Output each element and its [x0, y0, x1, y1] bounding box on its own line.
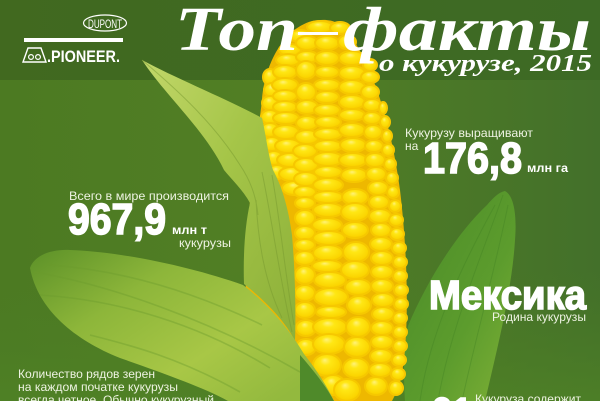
icon: upper-left leaf and husk wrapping the cob	[142, 60, 295, 341]
stat: world production: млн т	[172, 225, 207, 237]
stat: world production	[68, 189, 231, 250]
text block: kernel rows: на каждом початке кукурузы	[18, 380, 178, 394]
stat: contents	[432, 389, 581, 401]
stat: area grown: 176,8	[423, 134, 522, 183]
text block: kernel rows	[18, 367, 214, 401]
logo: Pioneer: .PIONEER.	[47, 47, 120, 66]
stat: world production: кукурузы	[179, 236, 231, 250]
stat: area grown: Кукурузу выращивают	[405, 126, 534, 140]
stat: area grown: млн га	[527, 163, 569, 175]
cob base	[240, 20, 407, 401]
corn cob	[240, 20, 408, 401]
logo: DuPont: DUPONT	[88, 17, 122, 31]
stat: area grown: на	[405, 139, 419, 153]
icon: big lower-left leaf	[30, 250, 334, 401]
stat: homeland: Родина кукурузы	[492, 310, 586, 324]
title	[175, 0, 591, 64]
stat: world production: Всего в мире производится	[69, 189, 229, 203]
icon: right corn leaf	[404, 191, 516, 401]
kernels	[261, 21, 408, 401]
logo: DuPont	[84, 15, 126, 31]
stat: area grown	[405, 126, 569, 183]
logo: Pioneer	[23, 38, 123, 66]
stat: world production: 967,9	[68, 195, 166, 244]
stat: homeland: Мексика	[429, 272, 587, 318]
subtitle: о кукурузе, 2015	[379, 51, 592, 77]
text block: kernel rows: Количество рядов зерен	[18, 367, 155, 381]
